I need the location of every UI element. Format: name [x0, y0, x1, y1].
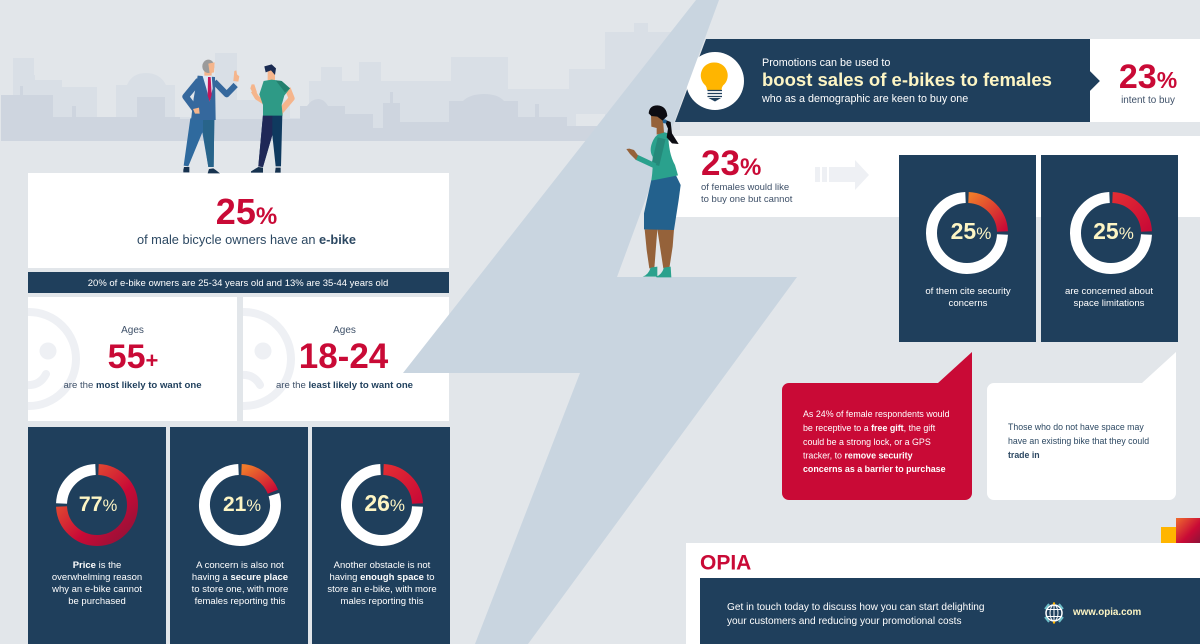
banner: promotions [675, 39, 1200, 122]
caption: most likely: are the most likely to want one [63, 380, 202, 391]
panel: space donut [1041, 155, 1178, 342]
donut chart: 77%: 77% [79, 492, 118, 516]
text: secure place: females reporting this [195, 596, 286, 607]
callout: free gift: free gift, the gift [871, 423, 935, 433]
icon: globe [1045, 602, 1063, 624]
decorative corner squares [1161, 518, 1200, 543]
callout: free gift [782, 352, 972, 500]
donut chart: 21% [204, 470, 275, 541]
text: space limitations: space limitations [1074, 298, 1145, 309]
panel: enough space donut [312, 427, 450, 644]
text: secure place: secure place [230, 572, 288, 583]
headline text: Promotions can be used to [762, 57, 890, 69]
headline text: boost sales of e-bikes to females [762, 69, 1052, 90]
donut chart: 25% space [1076, 198, 1146, 268]
donut chart: 25% space: 25% [1093, 218, 1134, 244]
panel: security donut [899, 155, 1036, 342]
callout: free gift: concerns as a barrier to purchase [803, 464, 946, 474]
callout: free gift: As 24% of female respondents would [803, 409, 950, 419]
text: price: overwhelming reason [52, 572, 142, 583]
footer contact bar [700, 578, 1200, 644]
callout: trade in: have an existing bike that they could [1008, 436, 1149, 446]
donut chart: 25% security: 25% [951, 218, 991, 244]
stat: 23% intent: intent to buy [1121, 95, 1175, 106]
logo: OPIA: OPIA [700, 552, 751, 574]
text: security concerns: concerns [949, 298, 988, 309]
donut chart: 26%: 26% [364, 490, 405, 516]
stat: 23% intent: 23% [1119, 58, 1177, 96]
caption: of females would like [701, 182, 789, 193]
figure: man in green shirt [250, 64, 292, 173]
label: ages: Ages [333, 325, 356, 336]
callout: free gift: tracker, to [803, 450, 844, 460]
donut chart: 77% [62, 470, 132, 540]
text: price: why an e-bike cannot [51, 584, 142, 595]
text: enough space: males reporting this [341, 596, 424, 607]
donut chart: 25% security [932, 198, 1002, 268]
panel: females would like to buy [650, 136, 1200, 217]
text: get in touch: Get in touch today to discuss how you can start delighting [727, 602, 985, 613]
banner: age stat [28, 272, 449, 293]
text: price: Price [73, 560, 96, 571]
headline text [761, 57, 1052, 105]
donut chart: 21%: 21% [223, 493, 261, 516]
link: website: www.opia.com [1072, 607, 1142, 618]
stat: 18-24: 18-24 [299, 337, 389, 376]
panel: ages 55+ [28, 297, 237, 421]
arrow [815, 160, 869, 190]
text: enough space: Another obstacle is not [334, 560, 431, 571]
text: enough space: store an e-bike, with more [327, 584, 437, 595]
lightning bolt [403, 0, 797, 644]
donut chart: 26% [347, 470, 417, 540]
panel: footer [686, 543, 1200, 644]
figure: businessman [183, 60, 239, 173]
stat: 25%: 25% [216, 191, 277, 232]
panel: secure place donut [170, 427, 308, 644]
callout: free gift: remove security [844, 450, 913, 460]
caption: least likely: are the least likely to want one [276, 380, 413, 391]
text: enough space: enough space to [360, 572, 435, 583]
figure: businesswoman [626, 105, 681, 277]
text: price: be purchased [68, 596, 126, 607]
text: secure place: to store one, with more [192, 584, 288, 595]
label: ages: Ages [121, 325, 144, 336]
panel: male e-bike owners [28, 173, 449, 268]
text: secure place: having a [192, 572, 230, 583]
text: price: is the [96, 560, 121, 571]
caption: male owners: of male bicycle owners have an e-bike [137, 232, 356, 247]
text: space limitations: are concerned about [1065, 286, 1153, 297]
banner: age stat: 20% of e-bike owners are 25-34 years old and 13% are 35-44 years old [88, 278, 388, 289]
callout: trade in [987, 352, 1176, 500]
intent panel [1090, 39, 1200, 122]
icon: smiley face [28, 308, 80, 410]
text: get in touch: your customers and reducing your promotional costs [727, 616, 962, 627]
text: secure place: A concern is also not [196, 560, 284, 571]
stat: 55+: 55+ [108, 338, 158, 376]
icon: light bulb [686, 52, 744, 110]
callout: trade in: trade in [1008, 450, 1040, 460]
text: security concerns: of them cite security [925, 286, 1011, 297]
headline text: who as a demographic are keen to buy one [761, 93, 968, 105]
text: enough space: having [329, 572, 360, 583]
panel: price donut [28, 427, 166, 644]
icon: sad face [243, 308, 295, 410]
background skyline [1, 23, 680, 141]
callout: free gift: could be a strong lock, or a GPS [803, 437, 931, 447]
panel: ages 18-24 [243, 297, 449, 421]
callout: trade in: Those who do not have space may [1008, 422, 1144, 432]
caption: to buy one but cannot [701, 194, 793, 205]
callout: free gift: be receptive to a [803, 423, 871, 433]
stat: 23%: 23% [701, 144, 761, 183]
